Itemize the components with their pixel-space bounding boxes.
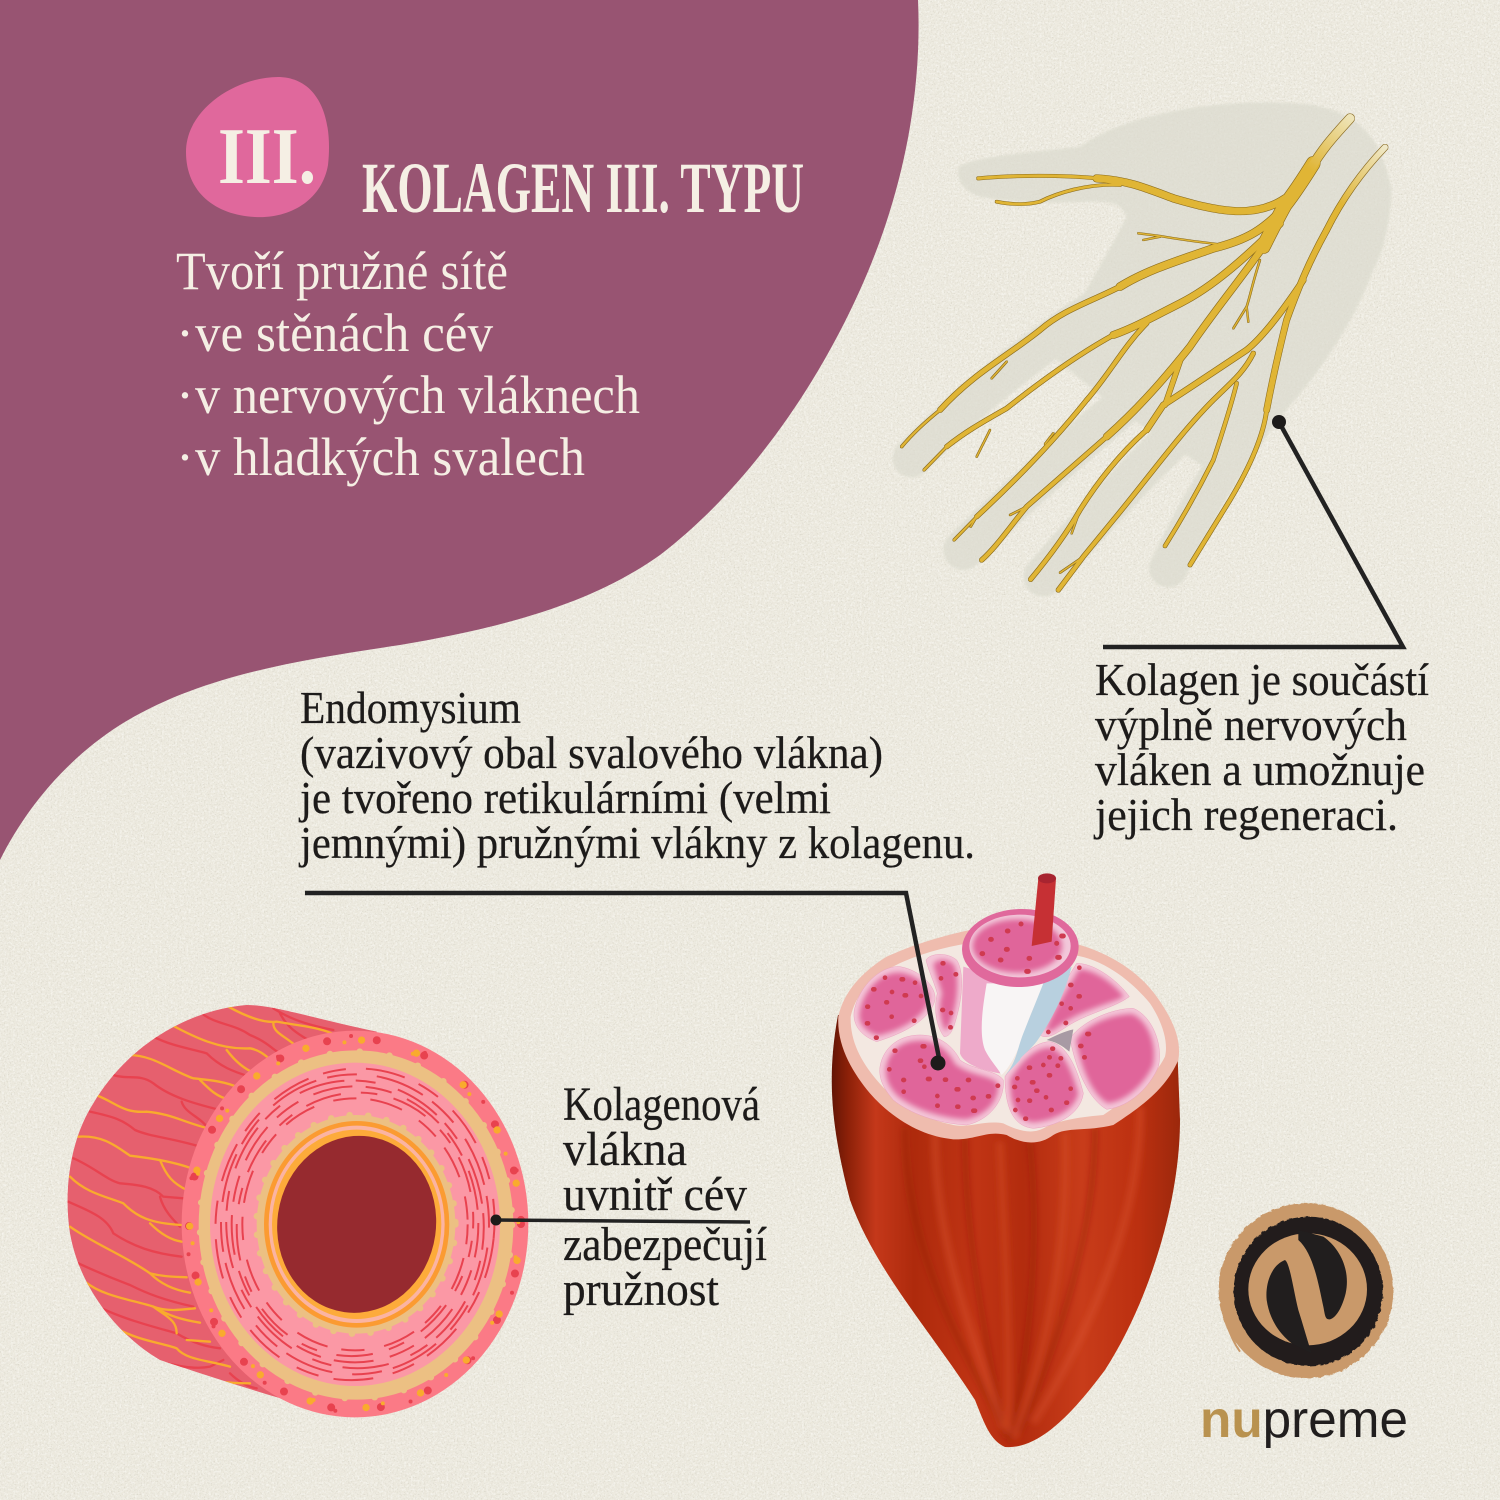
muscle fascicles [854, 954, 1160, 1128]
logo: nupreme [1200, 1203, 1408, 1449]
badge: roman numeral: III. [218, 113, 316, 201]
grey wedge [1047, 1029, 1073, 1052]
inner sheath [851, 942, 1166, 1131]
text: nerve note: Kolagen je součástí [1095, 654, 1429, 705]
callout: vessel collagen [490, 1214, 750, 1226]
plum header shape [0, 0, 919, 860]
top disc [961, 907, 1080, 989]
text: vessel note: zabezpečují [563, 1218, 767, 1271]
text: nerve note: výplně nervových [1095, 699, 1407, 750]
intro text block: Tvoří pružné sítě [176, 241, 508, 301]
intro text block: ve stěnách cév [195, 303, 493, 363]
callout: nerve fibres [1103, 415, 1403, 647]
text: vessel note: Kolagenová [563, 1078, 760, 1131]
callout: endomysium [305, 893, 946, 1070]
intro text block: v hladkých svalech [195, 427, 585, 487]
illustration: hand nerves [902, 102, 1392, 590]
text: nerve note: vláken a umožnuje [1095, 744, 1425, 795]
text: vessel note [563, 1078, 767, 1316]
intro text block [176, 241, 640, 487]
title: KOLAGEN III. TYPU [362, 148, 804, 228]
text: endomysium note: (vazivový obal svalového vlákna) [300, 727, 883, 778]
text: endomysium note: jemnými) pružnými vlákny z kolagenu. [298, 817, 975, 868]
intro text block: · [176, 427, 194, 487]
muscle section top [838, 873, 1179, 1142]
logo mark [1219, 1203, 1393, 1378]
intro text block: v nervových vláknech [195, 365, 640, 425]
hand silhouette [912, 102, 1392, 577]
text: vessel note: uvnitř cév [563, 1168, 747, 1221]
text: vessel note: pružnost [563, 1263, 720, 1316]
badge: roman numeral [186, 77, 329, 217]
nerve branches [902, 118, 1385, 590]
red vessel [1032, 873, 1056, 946]
text: vessel note: vlákna [563, 1123, 687, 1176]
illustration: muscle cross-section [832, 873, 1180, 1447]
central vessel sleeve [960, 967, 1072, 1077]
logo wordmark: nupreme [1200, 1391, 1408, 1449]
text: nerve note [1093, 654, 1429, 840]
vessel lumen [266, 1125, 448, 1323]
text: endomysium note: je tvořeno retikulárními (velmi [298, 772, 831, 823]
text: nerve note: jejich regeneraci. [1093, 789, 1398, 840]
muscle body [832, 1015, 1180, 1447]
vessel front face rings [182, 1031, 528, 1417]
illustration: blood vessel cross-section [68, 1005, 528, 1417]
text: endomysium note [298, 682, 975, 868]
outer sheath [838, 928, 1179, 1142]
intro text block: · [176, 365, 194, 425]
vessel outer wall [68, 1005, 377, 1417]
text: endomysium note: Endomysium [300, 682, 521, 733]
intro text block: · [176, 303, 194, 363]
